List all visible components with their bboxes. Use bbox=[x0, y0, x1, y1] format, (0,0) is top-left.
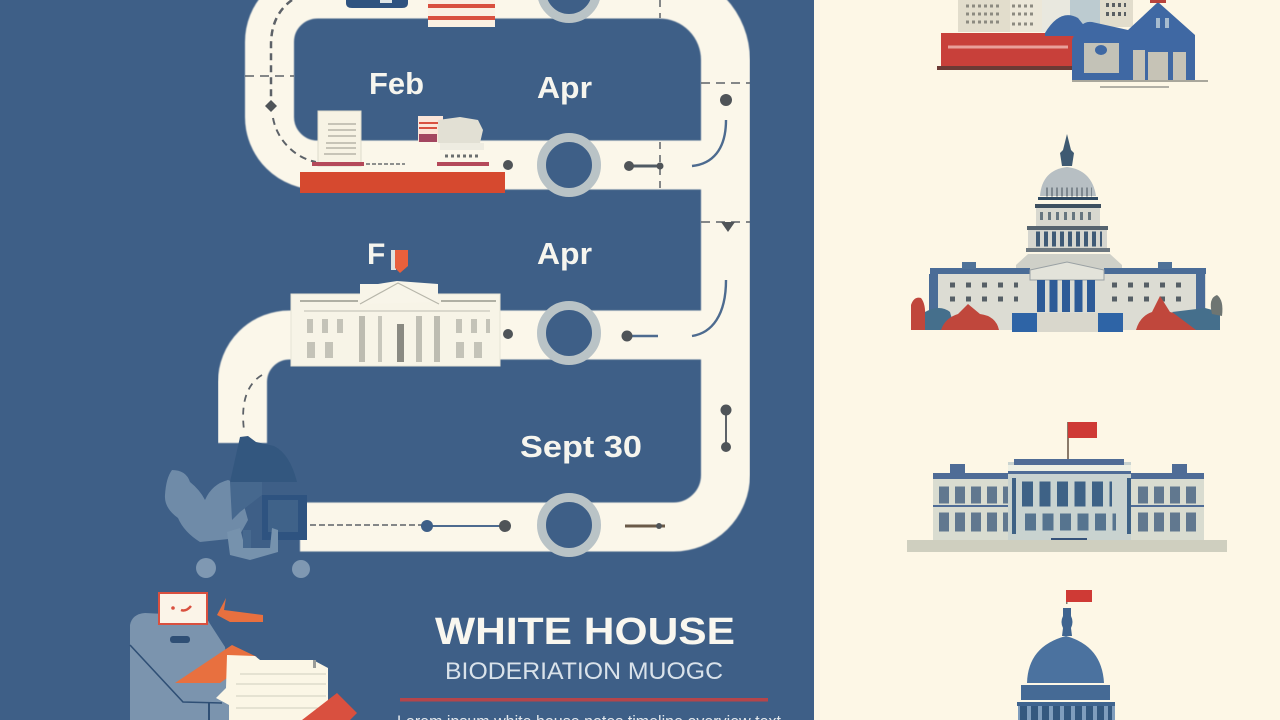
icon: top navy box and striped flag bbox=[346, 0, 495, 27]
icon: document and red banner on road bbox=[300, 111, 505, 193]
icon: white house on road bbox=[291, 281, 500, 366]
milestone ring: second bbox=[542, 138, 596, 192]
panel: cream landmarks background bbox=[814, 0, 1280, 720]
milestone ring: third bbox=[542, 306, 596, 360]
illustration: smoke and dark dome bbox=[165, 436, 310, 578]
label: Apr upper: Apr bbox=[537, 70, 592, 105]
illustration: US Capitol bbox=[911, 134, 1222, 332]
illustration: mailbox with papers bbox=[130, 593, 357, 720]
label: Apr lower: Apr bbox=[537, 236, 592, 271]
icon: paper stack bbox=[216, 655, 328, 720]
icon: red folder corner bbox=[302, 693, 357, 720]
road markings bbox=[243, 0, 750, 526]
title: WHITE HOUSE bbox=[435, 611, 735, 653]
divider line bbox=[400, 698, 768, 702]
illustration: government buildings top bbox=[937, 0, 1208, 88]
label: F: F bbox=[367, 238, 385, 271]
icon: small orange flag bbox=[391, 250, 408, 273]
illustration: blue dome bbox=[1017, 590, 1115, 720]
icon: orange envelope flap bbox=[175, 645, 257, 683]
icon: red note card bbox=[159, 593, 207, 624]
road marker dots bbox=[265, 94, 735, 532]
milestone ring: fourth bbox=[542, 498, 596, 552]
label: Feb: Feb bbox=[369, 66, 424, 101]
milestone ring: top bbox=[542, 0, 596, 18]
subtitle: BIODERIATION MUOGC bbox=[445, 658, 723, 685]
timeline road bbox=[242, 0, 725, 527]
illustration: White House right bbox=[907, 422, 1227, 552]
icon: bushes bbox=[911, 295, 1222, 330]
panel: navy timeline background bbox=[0, 0, 814, 720]
icon: orange swoosh bbox=[217, 598, 263, 622]
label: Sept 30: Sept 30 bbox=[520, 429, 642, 464]
